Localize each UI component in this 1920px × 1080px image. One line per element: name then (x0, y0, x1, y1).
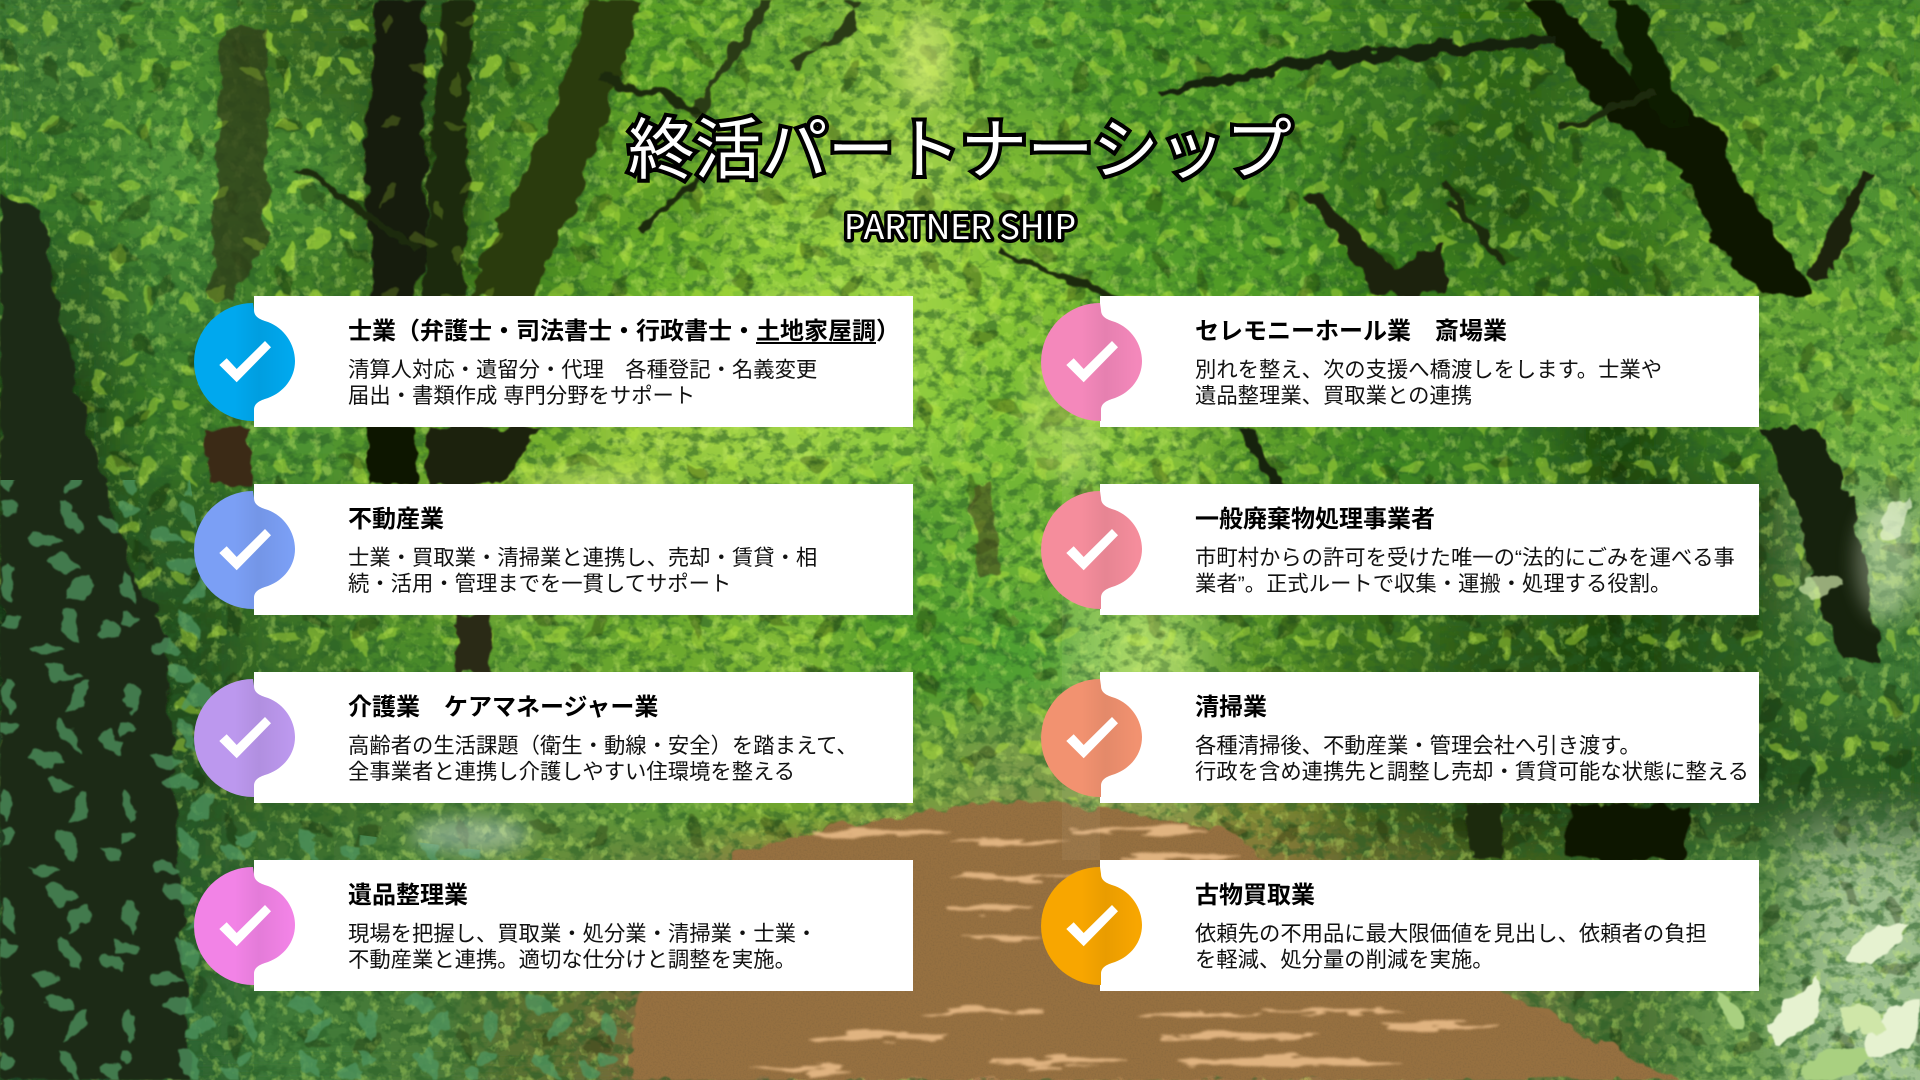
text block (348, 546, 817, 596)
heading: セレモニーホール業 斎場業 (1195, 318, 1507, 345)
panel: 遺品整理業 (194, 860, 913, 991)
panel: 古物買取業 (1040, 860, 1759, 991)
text block: 全事業者と連携し介護しやすい住環境を整える (348, 760, 795, 784)
heading: 一般廃棄物処理事業者 (1195, 506, 1435, 533)
text block: 清算人対応・遺留分・代理 各種登記・名義変更 (348, 358, 817, 382)
sunlit leaf layer (0, 0, 1920, 800)
text block: 続・活用・管理までを一貫してサポート (348, 572, 731, 596)
panel: 士業 (194, 296, 1088, 427)
text block (1195, 358, 1662, 409)
text block (1195, 546, 1735, 597)
heading: 士業（弁護士・司法書士・行政書士・土地家屋調） (348, 318, 900, 345)
text block: 不動産業と連携。適切な仕分けと調整を実施。 (348, 948, 796, 972)
text block: 現場を把握し、買取業・処分業・清掃業・士業・ (348, 922, 817, 946)
panel: 清掃業 (1040, 672, 1759, 803)
text block: 行政を含め連携先と調整し売却・賃貸可能な状態に整える (1195, 760, 1749, 784)
text block: を軽減、処分量の削減を実施。 (1195, 948, 1494, 972)
text block: 各種清掃後、不動産業・管理会社へ引き渡す。 (1195, 734, 1641, 758)
text block: 業者”。正式ルートで収集・運搬・処理する役割。 (1195, 572, 1671, 596)
icon: blue check badge (194, 303, 295, 421)
panel: 不動産業 (194, 484, 1087, 615)
text block: 市町村からの許可を受けた唯一の“法的にごみを運べる事 (1195, 546, 1735, 570)
text block (348, 922, 817, 972)
icon: magenta check badge (194, 867, 295, 985)
heading: 介護業 ケアマネージャー業 (348, 694, 658, 721)
text block: 依頼先の不用品に最大限価値を見出し、依頼者の負担 (1195, 922, 1707, 946)
icon: purple check badge (194, 679, 295, 797)
text block: 士業・買取業・清掃業と連携し、売却・賃貸・相 (348, 546, 817, 570)
text block (1195, 734, 1749, 785)
title (624, 97, 1295, 249)
text block (348, 734, 858, 784)
sunlit leaves over upper trunks (200, 0, 500, 300)
text block: 別れを整え、次の支援へ橋渡しをします。士業や (1195, 358, 1662, 382)
panel: セレモニーホール業 (1041, 296, 1759, 427)
icon: pink check badge (1041, 303, 1142, 421)
icon: periwinkle check badge (194, 491, 295, 609)
text block: 遺品整理業、買取業との連携 (1195, 384, 1472, 408)
text block (1195, 922, 1707, 973)
text block: 届出・書類作成 専門分野をサポート (348, 384, 695, 408)
translucent strip beside right column (1062, 427, 1100, 860)
teal undergrowth leaves lower left (0, 480, 618, 1080)
icon: salmon check badge (1041, 672, 1151, 803)
sky highlights through leaves (410, 14, 1915, 853)
heading: subtitle: PARTNER SHIP (844, 200, 1076, 249)
heading: main title: 終活パートナーシップ (628, 97, 1292, 193)
panel: 一般廃棄物処理事業者 (1040, 484, 1759, 615)
heading: 遺品整理業 (348, 882, 468, 909)
pale leaves bottom right (1708, 489, 1920, 1080)
icon: rose check badge (1041, 484, 1151, 615)
icon: orange check badge (1041, 860, 1151, 991)
text block: 高齢者の生活課題（衛生・動線・安全）を踏まえて、 (348, 734, 858, 758)
heading: 古物買取業 (1195, 882, 1315, 909)
text block (348, 358, 817, 408)
panel: 介護業 (194, 672, 1086, 803)
dirt path (620, 790, 1690, 1080)
heading: 不動産業 (348, 506, 444, 533)
heading: 清掃業 (1195, 694, 1267, 721)
